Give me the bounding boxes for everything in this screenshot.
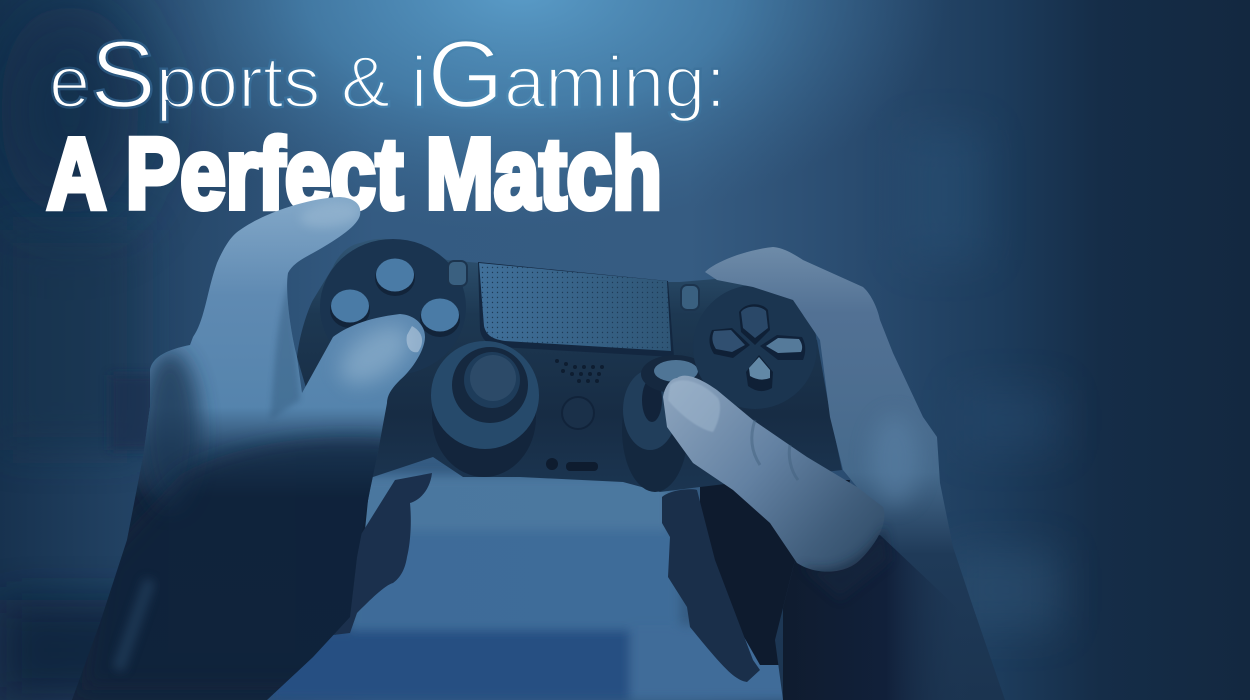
- right thumbstick: [622, 355, 709, 492]
- right thumb: [663, 376, 884, 572]
- small shoulder buttons: [448, 261, 699, 310]
- controller body: [297, 239, 842, 492]
- thumb base shadow: [800, 525, 890, 600]
- left thumb nail: [407, 326, 422, 352]
- left lower fingers: [333, 473, 432, 635]
- title: [47, 21, 726, 230]
- controller grips: [300, 400, 373, 635]
- palm lower shadow: [783, 535, 924, 700]
- palm highlight: [874, 424, 916, 506]
- fingertip highlight: [302, 204, 357, 228]
- title line one: eSports & iGaming:: [49, 21, 726, 128]
- finger crease shadow: [270, 280, 300, 420]
- thumb highlight: [335, 321, 412, 390]
- touchpad: [478, 262, 674, 357]
- right palm and back fingers: [705, 247, 1005, 700]
- thumb joint crease: [752, 420, 798, 480]
- palm shadow: [163, 426, 382, 684]
- speaker grille: [555, 359, 604, 383]
- left palm and index finger: [60, 190, 440, 700]
- right thumb nail: [668, 380, 720, 432]
- right lower fingers: [662, 489, 760, 682]
- left hand: [60, 190, 440, 700]
- title line two: A Perfect Match: [47, 118, 662, 230]
- charging port: [546, 458, 598, 471]
- home button: [562, 397, 594, 429]
- left d-pad buttons: [320, 239, 466, 375]
- right action buttons: [693, 285, 817, 409]
- right hand: [662, 240, 1020, 700]
- game controller: [297, 239, 850, 665]
- left thumbstick: [431, 341, 539, 477]
- knuckle shadow: [140, 350, 200, 510]
- wrist highlight: [118, 580, 150, 670]
